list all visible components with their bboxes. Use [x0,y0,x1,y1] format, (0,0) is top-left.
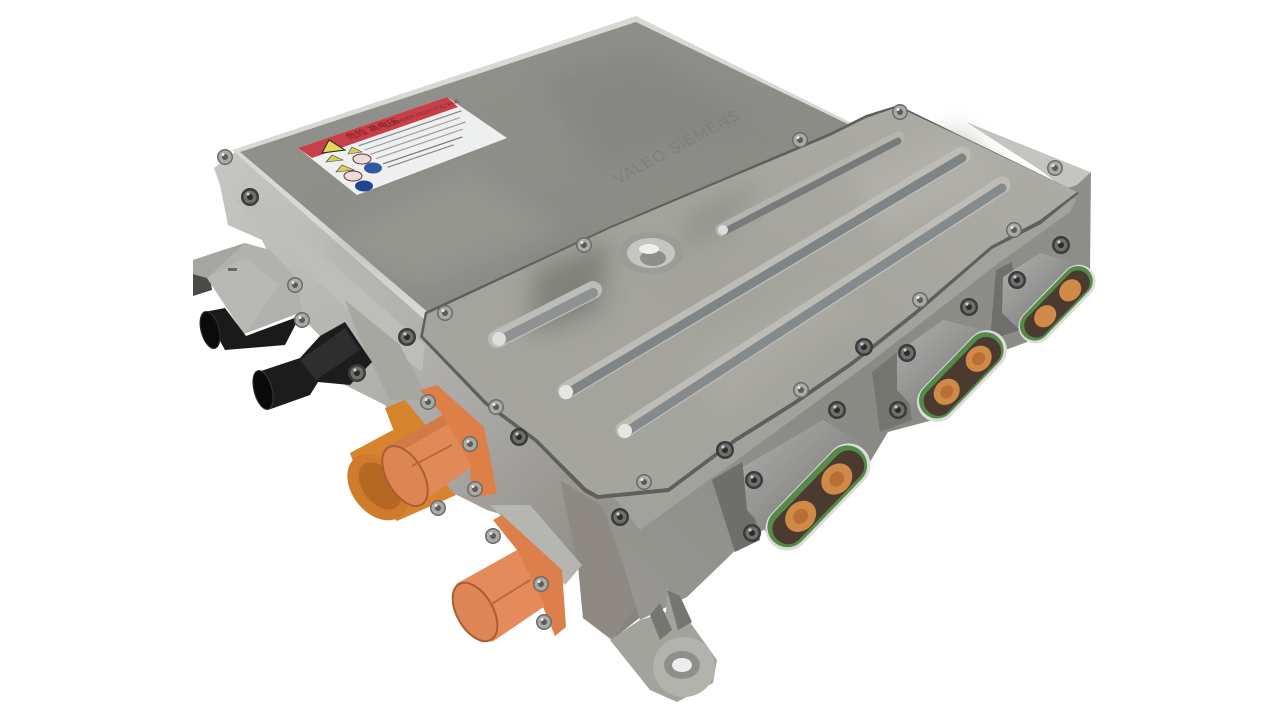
plate shading [530,130,1010,420]
plate dimple [619,232,683,274]
rear light sliver behind the unit [966,122,1090,205]
label heading text: 危险 高电压 [342,116,403,141]
embossed brand text: VALEO SIEMENS [610,107,745,187]
connector 3 [1002,253,1103,350]
warning label [298,96,507,195]
left side wall of the housing [214,150,662,640]
front plate [420,105,1079,499]
lower orange high-voltage connector [443,515,566,649]
perimeter screws [217,104,1070,630]
warning label: DANGER HIGH VOLTAGE [388,99,463,127]
connector 2 [897,320,1015,430]
lid shading [330,50,760,290]
right side wall of the housing [590,172,1091,620]
label hazard icons [322,140,382,192]
gray signal connector [193,243,302,334]
connector 1 [743,420,880,560]
rear orange high-voltage connector [335,400,456,532]
front orange high-voltage connector [373,385,497,514]
front black coolant port [249,322,372,412]
stiffening ribs [492,138,1002,438]
rear black coolant port [196,308,300,351]
upper lid plate [232,16,862,320]
three-phase output connectors [743,253,1103,560]
mounting ear with bolt hole [610,587,717,702]
